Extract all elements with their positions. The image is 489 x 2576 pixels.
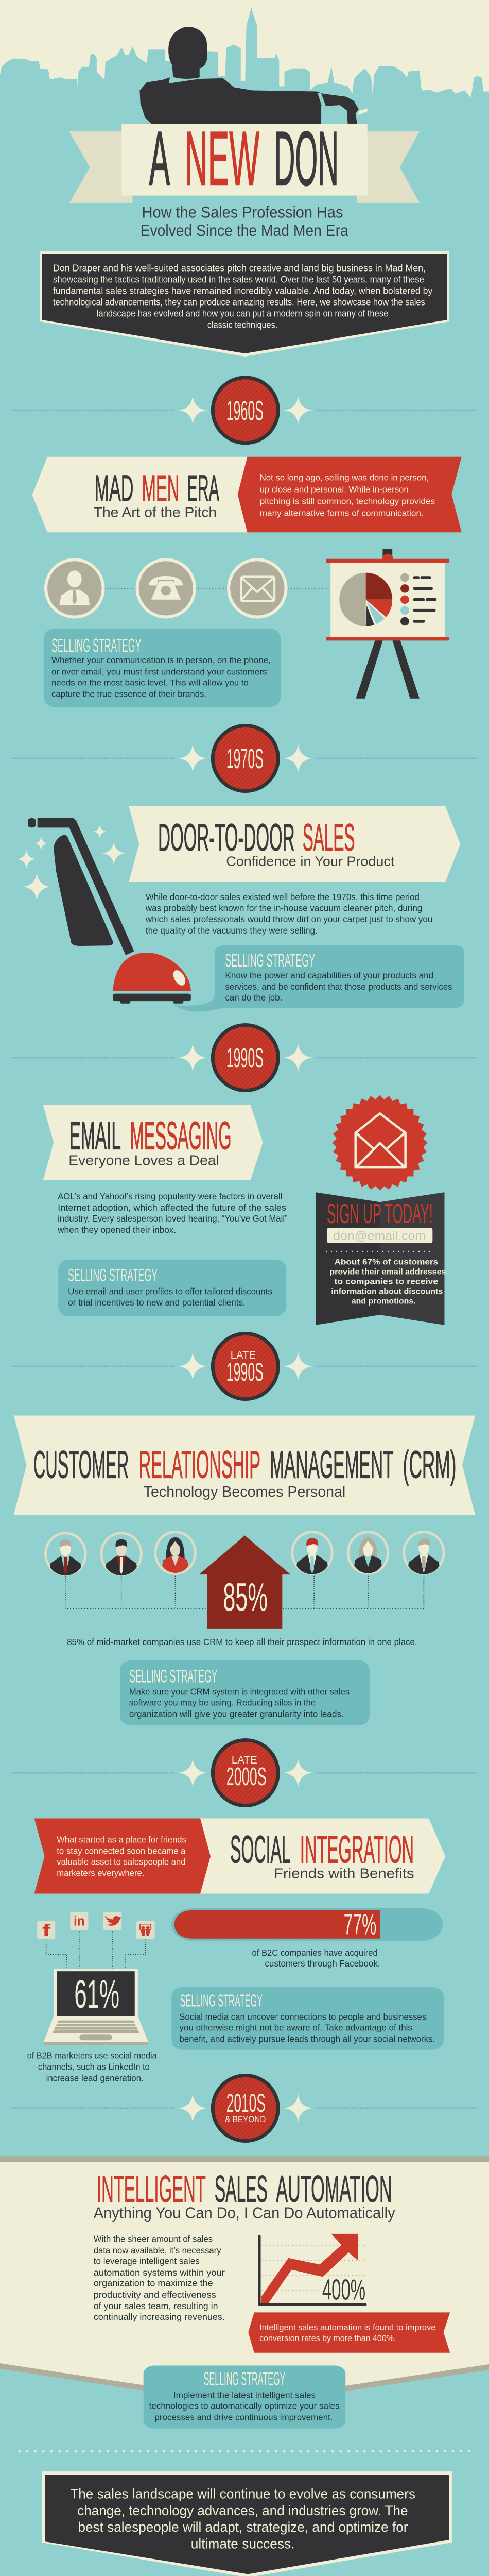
body text: AOL’s and Yahoo!’s rising popularity were factors in overall (58, 1192, 282, 1201)
person 3 (155, 1532, 195, 1573)
badge: 1960s (12, 376, 477, 445)
panel: sign up (316, 1192, 446, 1325)
icon: laptop with 61% (44, 1969, 148, 2045)
icon: person (44, 558, 105, 619)
line chart (259, 2234, 366, 2306)
body text: the quality of the vacuums they were selling. (146, 925, 318, 936)
icon: facebook (37, 1921, 55, 1940)
callout ribbon: Intelligent sales automation is found to improve (259, 2323, 435, 2332)
statistic text: About 67% of customers (334, 1258, 438, 1267)
intro box (40, 251, 449, 357)
selling strategy (144, 2365, 345, 2429)
banner: Technology Becomes Personal (144, 1484, 345, 1500)
pie chart (339, 573, 392, 626)
selling strategy: SELLING STRATEGY (204, 2369, 285, 2389)
icon: telephone (136, 558, 196, 619)
laptop caption (27, 2051, 157, 2083)
badge: 1970s (12, 724, 477, 793)
heading: INTELLIGENT (97, 2168, 206, 2210)
selling strategy: or trial incentives to new and potential clients. (68, 1298, 246, 1308)
icon: starburst seal (333, 1095, 427, 1190)
central arrow house with 85% (199, 1535, 291, 1629)
laptop caption: of B2B marketers use social media (27, 2051, 157, 2061)
title text: A (149, 116, 170, 202)
selling strategy: capture the true essence of their brands. (51, 689, 206, 699)
conclusion box: change, technology advances, and industries grow. The (77, 2502, 408, 2518)
banner: Everyone Loves a Deal (68, 1153, 219, 1168)
pie legend (400, 573, 436, 625)
selling strategy (171, 1987, 444, 2050)
badge: late 2000s: LATE (232, 1754, 257, 1766)
body text: data now available, it’s necessary (94, 2246, 221, 2256)
person 1 (45, 1533, 85, 1575)
progress bar: 77% (171, 1908, 443, 1941)
heading: SALES (215, 2168, 268, 2210)
heading: MAD (95, 467, 133, 509)
body text: to leverage intelligent sales (94, 2256, 200, 2266)
email input: don@email.com (333, 1229, 426, 1243)
body text: Internet adoption, which affected the future of the sales (58, 1202, 286, 1213)
laptop caption: increase lead generation. (46, 2074, 144, 2083)
selling strategy (44, 629, 281, 707)
badge: late 1990s: 1990S (226, 1358, 264, 1386)
section: CRM (14, 1416, 475, 1725)
banner text: up close and personal. While in-person (260, 484, 409, 494)
banner: valuable asset to salespeople and (57, 1857, 185, 1867)
selling strategy: can do the job. (225, 992, 282, 1003)
conclusion box (42, 2471, 452, 2576)
conclusion and footer (0, 2471, 489, 2576)
progress bar: 77%: 77% (344, 1908, 376, 1941)
icon: open envelope (356, 1113, 406, 1167)
person 5 (348, 1532, 388, 1573)
heading: MEN (142, 467, 179, 509)
statistic text: to companies to receive (334, 1277, 438, 1286)
badge: 2010s and beyond: 2010S (226, 2089, 266, 2117)
selling strategy: SELLING STRATEGY (51, 635, 141, 656)
line chart: 400% (322, 2274, 365, 2306)
selling strategy (120, 1660, 370, 1725)
callout ribbon: conversion rates by more than 400%. (259, 2334, 396, 2343)
cream sky (0, 0, 489, 210)
selling strategy: SELLING STRATEGY (180, 1991, 263, 2010)
bar caption: of B2C companies have acquired (252, 1948, 378, 1958)
banner: Friends with Benefits (274, 1865, 414, 1882)
banner: EMAIL (69, 1114, 121, 1158)
selling strategy: Make sure your CRM system is integrated with other sales (129, 1687, 350, 1697)
selling strategy: Whether your communication is in person, on the phone, (51, 655, 271, 665)
title text (149, 116, 339, 202)
title text: NEW (185, 116, 259, 202)
icon: twitter (103, 1912, 121, 1930)
city skyline (0, 7, 489, 330)
Don silhouette (139, 27, 368, 124)
laptop caption: channels, such as LinkedIn to (38, 2062, 150, 2072)
body text (57, 1192, 288, 1235)
selling strategy: organization will give you greater granularity into leads. (129, 1709, 344, 1719)
person 6 (404, 1532, 444, 1574)
intro box: classic techniques. (207, 319, 277, 330)
icon: linkedin (70, 1912, 88, 1930)
banner text: many alternative forms of communication. (260, 508, 424, 518)
banner (129, 806, 460, 882)
banner text: pitching is still common, technology provides (260, 496, 435, 506)
banner: What started as a place for friends (57, 1835, 186, 1845)
badge: 2010s and beyond (12, 2074, 477, 2143)
dotted connectors (65, 1574, 424, 1609)
bar caption: customers through Facebook. (265, 1959, 380, 1969)
bar caption (252, 1948, 380, 1969)
body text: productivity and effectiveness (94, 2290, 216, 2300)
section: Email Messaging (43, 1105, 446, 1325)
header: skyline and title (0, 0, 489, 330)
sparkles (17, 825, 126, 901)
banner text: Not so long ago, selling was done in person, (260, 472, 429, 482)
section: Social Integration (27, 1819, 445, 2083)
subtitle: Evolved Since the Mad Men Era (141, 222, 348, 240)
banner (43, 1105, 263, 1180)
body text: industry. Every salesperson loved hearing, “You’ve Got Mail” (58, 1214, 288, 1224)
conclusion box: The sales landscape will continue to evolve as consumers (70, 2486, 415, 2502)
banner (32, 457, 462, 532)
selling strategy: Use email and user profiles to offer tailored discounts (68, 1286, 272, 1296)
subtitle (141, 204, 348, 240)
section: Intelligent Sales Automation: Anything You Can Do, I Can Do Automatically (94, 2205, 395, 2222)
icon: facebook: f (42, 1921, 50, 1940)
banner (14, 1416, 475, 1515)
selling strategy: Implement the latest intelligent sales (173, 2391, 316, 2400)
banner text (260, 472, 435, 518)
body text (94, 2234, 225, 2322)
body text: when they opened their inbox. (57, 1225, 176, 1235)
banner: SOCIAL (230, 1828, 291, 1871)
selling strategy: software you may be using. Reducing silos in the (129, 1698, 316, 1708)
banner: CUSTOMER (33, 1443, 129, 1486)
cream panel (0, 2156, 489, 2406)
body text: continually increasing revenues. (94, 2312, 225, 2322)
icon: slideshare (136, 1921, 155, 1939)
presentation board with pie chart (326, 549, 449, 699)
selling strategy: you otherwise might not be aware of. Take advantage of this (179, 2023, 412, 2033)
banner: ERA (187, 467, 219, 509)
badge: 2010s and beyond: & BEYOND (225, 2114, 266, 2124)
icon: laptop with 61%: 61% (74, 1973, 119, 2016)
banner: Confidence in Your Product (226, 854, 395, 869)
selling strategy: SELLING STRATEGY (68, 1266, 158, 1285)
icon: linkedin: in (74, 1914, 85, 1929)
callout ribbon (248, 2312, 450, 2353)
selling strategy: or over email, you must first understand your customers’ (51, 667, 269, 676)
banner (34, 1819, 445, 1894)
email input (327, 1228, 432, 1243)
section: Door-to-Door Sales (17, 806, 464, 1012)
badge: 1970s: 1970S (226, 743, 264, 774)
banner: marketers everywhere. (57, 1869, 145, 1878)
selling strategy: needs on the most basic level. This will allow you to (51, 677, 249, 687)
badge: late 1990s (12, 1332, 477, 1401)
badge: late 1990s: LATE (231, 1349, 256, 1361)
badge: 1990s (12, 1023, 477, 1092)
subtitle: How the Sales Profession Has (142, 204, 343, 222)
selling strategy (58, 1260, 286, 1316)
banner: to stay connected soon became a (57, 1846, 186, 1856)
dotted connectors (46, 1930, 145, 1969)
person 2 (101, 1533, 141, 1575)
conclusion box: best salespeople will adapt, strategize, and optimize for (78, 2519, 408, 2535)
badge: 1960s: 1960S (226, 395, 264, 426)
badge: late 2000s: 2000S (226, 1763, 267, 1791)
section: Mad Men Era (32, 457, 462, 707)
icon: vacuum cleaner (28, 818, 191, 1004)
selling strategy (173, 945, 464, 1012)
body text: automation systems within your (94, 2268, 225, 2278)
conclusion box: ultimate success. (191, 2536, 295, 2552)
badge: late 2000s (12, 1738, 477, 1807)
selling strategy: processes and drive continuous improvement. (155, 2413, 333, 2422)
banner: The Art of the Pitch (94, 504, 217, 520)
dotted connectors (105, 587, 330, 589)
person 4 (292, 1532, 332, 1574)
body text: With the sheer amount of sales (94, 2234, 213, 2244)
body text: of your sales team, resulting in (94, 2301, 218, 2311)
section: Email Messaging: MESSAGING (130, 1114, 232, 1158)
body text (145, 892, 432, 936)
central arrow house with 85%: 85% (223, 1575, 268, 1619)
section: Intelligent Sales Automation (0, 2156, 489, 2429)
statistic text: and promotions. (352, 1297, 416, 1306)
body text: organization to maximize the (94, 2278, 213, 2289)
badge: 1990s: 1990S (226, 1043, 264, 1074)
icon: envelope (227, 558, 288, 619)
statistic text (329, 1258, 446, 1306)
title ribbon (69, 116, 420, 203)
selling strategy: technologies to automatically optimize your sales (149, 2401, 340, 2411)
selling strategy: SELLING STRATEGY (129, 1666, 217, 1686)
